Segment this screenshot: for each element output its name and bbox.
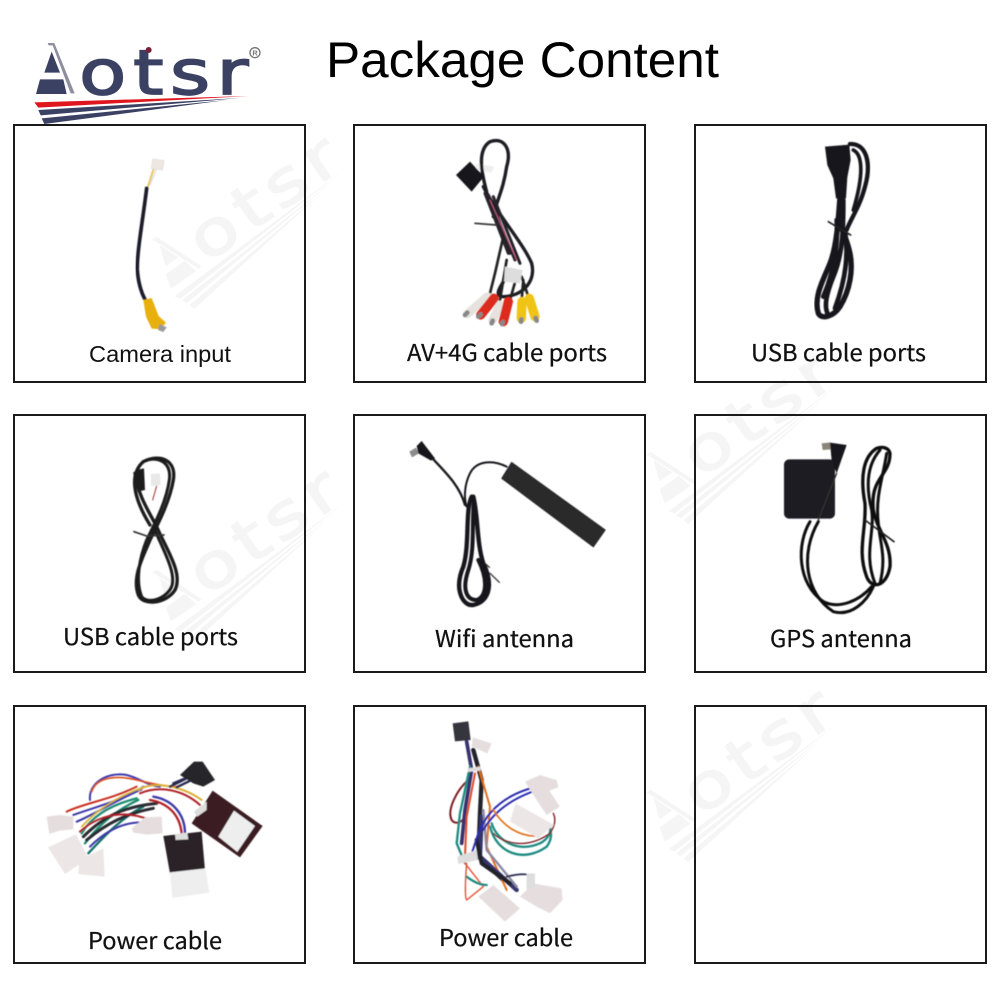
icon: camera cable (137, 159, 167, 332)
registered mark (250, 48, 260, 58)
icon: AV cable (456, 141, 537, 324)
watermark: logo behind second row right: otsr (668, 335, 848, 491)
title: Package Content (326, 32, 719, 88)
registered mark: R (252, 48, 258, 57)
label: GPS antenna (770, 620, 912, 654)
label: USB cable ports (63, 618, 238, 652)
icon: GPS antenna (784, 442, 894, 613)
label: Power cable (439, 919, 573, 953)
panel frame (695, 415, 986, 672)
panel frame (354, 415, 645, 672)
panel frame (695, 125, 986, 382)
watermark: logo behind second row right (631, 335, 856, 529)
logo dot (146, 47, 152, 53)
watermark: logo behind first row (137, 120, 362, 314)
panel: USB cable ports left (14, 415, 305, 672)
label: Power cable (88, 922, 222, 956)
logo mark: triangle A (36, 52, 67, 94)
panel: empty (695, 706, 986, 963)
panel: USB cable ports top (695, 125, 986, 382)
watermark: logo in empty panel (631, 673, 856, 867)
panel frame (14, 415, 305, 672)
logo wordmark: otsr (79, 37, 249, 109)
watermark: logo behind second row left: otsr (174, 453, 354, 609)
label: USB cable ports (751, 334, 926, 368)
label: AV+4G cable ports (407, 334, 607, 368)
panel: Power cable left (14, 706, 305, 963)
watermark: logo in empty panel: otsr (668, 673, 848, 829)
panel: GPS antenna (695, 415, 986, 672)
label: Wifi antenna (435, 620, 574, 654)
panel: camera input (14, 125, 305, 382)
logo swoosh red (34, 96, 248, 108)
watermark: logo behind first row: otsr (174, 120, 354, 276)
panel frame (14, 706, 305, 963)
panel: AV+4G cable ports (354, 125, 645, 382)
icon: power harness (450, 721, 563, 922)
watermark: logo behind second row left (137, 453, 362, 647)
icon: wifi antenna (409, 441, 605, 605)
label: Camera input (89, 341, 232, 367)
panel: Power cable right (354, 706, 645, 963)
logo mark: A slash (48, 43, 75, 93)
icon: power harness with boxes (47, 762, 263, 898)
icon: USB figure-8 cable (134, 458, 177, 602)
icon: USB cable (817, 144, 868, 317)
panel frame (354, 706, 645, 963)
logo swoosh blue (38, 98, 240, 124)
panel frame (14, 125, 305, 382)
panel frame (354, 125, 645, 382)
logo: Aotsr (34, 37, 260, 124)
panel: Wifi antenna (354, 415, 645, 672)
